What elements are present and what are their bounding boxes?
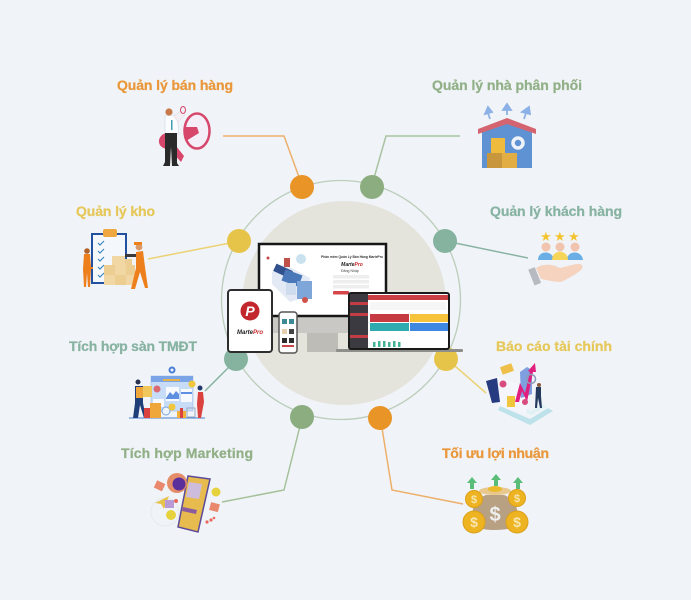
devices mockup [228,244,463,353]
desktop monitor: Đăng Nhập [341,269,359,273]
icon: customers with stars and hand: ★ [540,229,552,244]
node: yellow left [227,229,251,253]
icon: customers with stars and hand: ★ [568,229,580,244]
icon: customers with stars and hand: ★ [554,229,566,244]
connector: Tích hợp Marketing [222,426,300,502]
icon: financial report illustration [486,363,553,425]
icon: warehouse staff with checklist [83,229,148,289]
heading: Quản lý khách hàng: Quản lý khách hàng [490,203,622,219]
node: orange top [290,175,314,199]
heading: Tối ưu lợi nhuận: Tối ưu lợi nhuận [442,445,549,461]
desktop monitor [258,244,387,352]
tablet: MartePro [237,330,263,336]
icon: warehouse with arrows [478,104,536,168]
icon: e-commerce dashboard scene [129,368,205,418]
icon: money bag with coins: $ [489,504,501,526]
heading: Báo cáo tài chính: Báo cáo tài chính [496,338,612,354]
icon: money bag with coins: $ [514,493,520,505]
connector: Tối ưu lợi nhuận [382,428,463,504]
icon: money bag with coins [463,474,528,533]
desktop monitor: Phần mềm Quản Lý Bán Hàng MartePro [321,255,384,259]
connector: Quản lý khách hàng [455,243,528,258]
heading: Tích hợp Marketing: Tích hợp Marketing [121,445,253,461]
heading: Tích hợp sàn TMĐT: Tích hợp sàn TMĐT [69,338,197,354]
icon: marketing phone with megaphone [151,473,220,532]
node: orange bottom [368,406,392,430]
connector: Báo cáo tài chính [455,366,486,393]
outer ring [222,180,460,420]
node: green top [360,175,384,199]
node: yellow right [434,347,458,371]
heading: Quản lý bán hàng: Quản lý bán hàng [117,77,233,93]
heading: Quản lý nhà phân phối: Quản lý nhà phân phối [432,77,582,93]
icon: money bag with coins: $ [513,514,521,530]
icon: man with megaphone [159,106,210,166]
laptop dashboard [336,293,463,352]
node: teal left [224,347,248,371]
tablet: P [245,303,255,319]
connector: Quản lý nhà phân phối [374,136,460,178]
tablet [228,290,272,352]
connector: Quản lý bán hàng [223,136,299,177]
node: teal right [433,229,457,253]
phone [279,312,297,353]
central beige circle [242,201,446,405]
connector: Tích hợp sàn TMĐT [205,366,230,391]
icon: customers with stars and hand [528,229,583,285]
heading: Quản lý kho: Quản lý kho [76,203,155,219]
connector: Quản lý kho [148,243,230,259]
icon: money bag with coins: $ [471,494,477,506]
desktop monitor: MartePro [341,262,363,268]
icon: money bag with coins: $ [470,514,478,530]
node: green bottom [290,405,314,429]
